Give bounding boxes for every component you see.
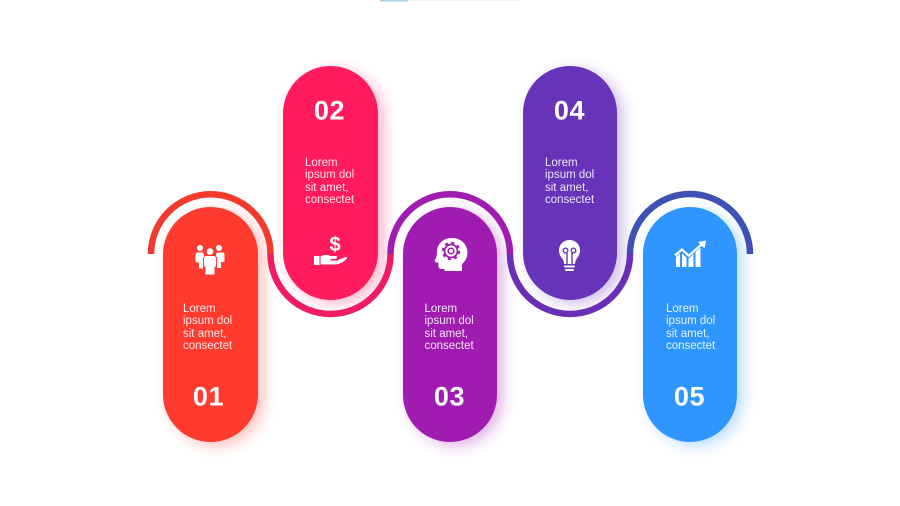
panel: step 01 [163,207,264,446]
text: step 03 description: sit amet, [424,328,468,340]
icon: hand holding dollar: $ [329,234,341,256]
text: step 04 description: ipsum dol [545,169,594,181]
text: step 01 description: sit amet, [183,328,226,340]
number: 02: 02 [314,96,345,126]
text: step 03 description: ipsum dol [424,315,474,327]
text: step 04 description: Lorem [545,157,578,169]
text: step 02 description: sit amet, [305,182,348,194]
panel: step 04 [523,66,623,304]
icon: hand holding dollar [314,234,347,265]
icon: light bulb [559,240,580,271]
icon: growth chart [675,240,706,267]
text: step 03 description: consectet [424,340,475,352]
number: 04: 04 [554,96,585,126]
panel: step 03 [403,207,503,446]
number: 05: 05 [674,382,705,412]
icon: people group [196,245,224,274]
text: step 04 description: consectet [545,194,595,206]
panel: step 02 [283,66,384,304]
text: step 05 description: Lorem [666,303,699,315]
text: step 01 description: Lorem [183,303,216,315]
number: 01: 01 [193,382,224,412]
text: step 03 description: Lorem [424,303,457,315]
wave connector [151,194,750,314]
text: step 05 description: sit amet, [666,328,709,340]
panel: step 05 [643,207,743,446]
text: step 01 description: ipsum dol [183,315,232,327]
text: step 02 description: consectet [305,194,355,206]
text: step 02 description: ipsum dol [305,169,354,181]
text: step 01 description: consectet [183,340,233,352]
text: step 05 description: ipsum dol [666,315,715,327]
text: step 04 description: sit amet, [545,182,588,194]
text: step 02 description: Lorem [305,157,338,169]
icon: head with gear [435,238,468,271]
number: 03: 03 [434,382,465,412]
text: step 05 description: consectet [666,340,716,352]
